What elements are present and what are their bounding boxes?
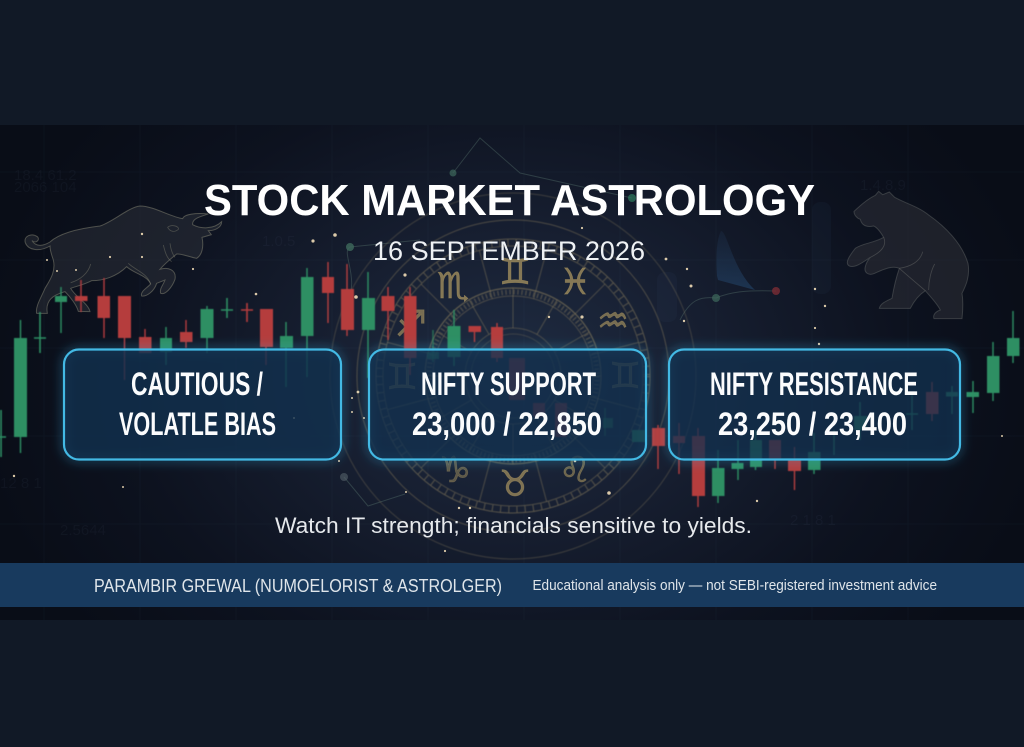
bias text: [119, 366, 276, 442]
panel: bias: [64, 350, 341, 460]
faded background pillars: [657, 202, 831, 322]
resistance text: 23,250 / 23,400: [718, 406, 907, 442]
candlestick chart: [0, 262, 1020, 507]
zodiac symbols: ♐: [395, 304, 427, 345]
bias text: VOLATLE BIAS: [119, 406, 276, 442]
zodiac symbols: ♊: [609, 356, 641, 397]
resistance text: [710, 366, 918, 442]
support text: NIFTY SUPPORT: [421, 366, 596, 402]
bear outline: [847, 191, 969, 319]
zodiac symbols: ♒: [597, 301, 629, 342]
panel: nifty resistance: [669, 350, 960, 460]
zodiac symbols: ♉: [499, 464, 531, 505]
faded background numbers: [0, 167, 906, 539]
constellation lines: [340, 138, 780, 506]
dark central banner: [0, 125, 1024, 620]
panel: nifty support: [369, 350, 646, 460]
zodiac symbols: ♓: [559, 262, 591, 303]
zodiac symbols: ♊: [386, 357, 418, 398]
faded background numbers: 1.0.5: [262, 233, 295, 250]
zodiac symbols: ♊: [499, 252, 531, 293]
support text: 23,000 / 22,850: [412, 406, 602, 442]
zodiac symbols: ♌: [559, 450, 591, 491]
zodiac symbols: ♏: [437, 266, 469, 307]
resistance text: NIFTY RESISTANCE: [710, 366, 918, 402]
faded background numbers: 2.5644: [60, 522, 106, 539]
faded background numbers: 1.4.8.9: [860, 177, 906, 194]
zodiac symbols: ♑: [439, 450, 471, 491]
bull outline: [25, 206, 222, 313]
stars: [13, 227, 1003, 552]
zodiac wheel: [330, 193, 696, 559]
faded background numbers: 2 1 8 1: [790, 512, 836, 529]
zodiac symbols: [386, 252, 641, 505]
footer bar: [0, 563, 1024, 607]
faded background numbers: 12 8 1: [0, 475, 42, 492]
support text: [412, 366, 602, 442]
date: 16 SEPTEMBER 2026: [373, 236, 645, 266]
author credit: PARAMBIR GREWAL (NUMOELORIST & ASTROLGER): [94, 576, 502, 596]
bias text: CAUTIOUS /: [131, 366, 263, 402]
faded background numbers: 2066 104: [14, 179, 77, 196]
sector note: Watch IT strength; financials sensitive to yields.: [275, 513, 752, 538]
disclaimer: Educational analysis only — not SEBI-registered investment advice: [532, 578, 937, 594]
faded background numbers: 18.4 61.2: [14, 167, 77, 184]
title: STOCK MARKET ASTROLOGY: [204, 176, 815, 225]
